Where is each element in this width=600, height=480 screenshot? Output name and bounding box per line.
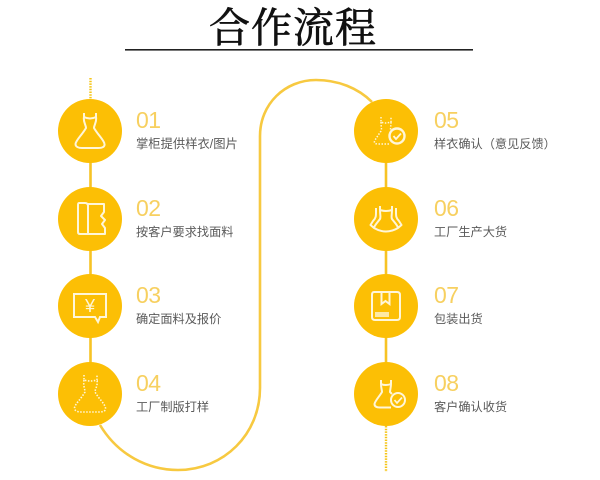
step 08 number: 08 — [434, 370, 459, 396]
step 06 label: 工厂生产大货 — [434, 224, 507, 239]
step 02 circle — [58, 187, 122, 251]
icon: dress with check — [374, 380, 392, 408]
step 02 label: 按客户要求找面料 — [136, 224, 234, 239]
step 06 number: 06 — [434, 195, 459, 221]
title underline — [125, 49, 473, 51]
step 06 circle — [354, 187, 418, 251]
step 01 circle — [58, 99, 122, 163]
step 02 — [58, 187, 234, 251]
step 05 label: 样衣确认（意见反馈） — [434, 136, 556, 151]
connector: right dotted end — [385, 426, 387, 472]
icon: dress — [76, 113, 105, 148]
icon: fabric roll — [78, 203, 105, 234]
icon: package box — [372, 292, 400, 320]
icon: check badge — [390, 128, 404, 144]
icon: dotted dress — [74, 375, 106, 412]
step 04 circle — [58, 362, 122, 426]
step 05 circle — [354, 99, 418, 163]
step 04 label: 工厂制版打样 — [136, 399, 209, 414]
connector: left column line — [89, 130, 92, 394]
step 01 — [58, 99, 238, 163]
step 03 circle — [58, 274, 122, 338]
step 03 — [58, 274, 221, 338]
step 05 number: 05 — [434, 107, 459, 133]
step 03 label: 确定面料及报价 — [136, 311, 221, 326]
step 07 number: 07 — [434, 282, 459, 308]
step 01 label: 掌柜提供样衣/图片 — [136, 136, 238, 151]
step 07 label: 包装出货 — [434, 311, 483, 326]
step 04 number: 04 — [136, 370, 161, 396]
icon: bulk garments — [370, 206, 402, 232]
icon: dotted dress with check — [374, 117, 391, 144]
icon: package barcode — [375, 312, 389, 317]
connector: right column line — [385, 130, 387, 394]
step 05 — [354, 99, 556, 163]
step 08 label: 客户确认收货 — [434, 399, 507, 414]
step 04 — [58, 362, 209, 426]
step 03 number: 03 — [136, 282, 161, 308]
step 02 number: 02 — [136, 195, 161, 221]
step 07 — [354, 274, 483, 338]
step 08 circle — [354, 362, 418, 426]
icon: yen sign: ¥ — [84, 296, 96, 316]
icon: check badge — [391, 393, 405, 407]
icon: price speech bubble — [74, 294, 106, 322]
connector: S-curve between columns — [100, 80, 372, 470]
step 06 — [354, 187, 507, 251]
step 01 number: 01 — [136, 107, 161, 133]
step 08 — [354, 362, 507, 426]
step 07 circle — [354, 274, 418, 338]
connector: left dotted start — [89, 78, 92, 100]
